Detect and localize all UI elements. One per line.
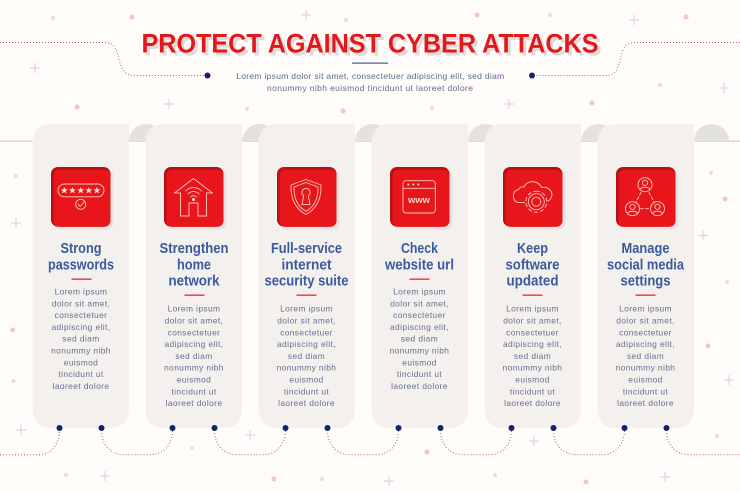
body text: dolor sit amet, [165, 316, 223, 326]
body text: tincidunt ut [623, 386, 668, 396]
heading: passwords [48, 257, 114, 273]
body text: nonummy nibh [616, 363, 675, 373]
heading: Full-service [271, 241, 342, 257]
ribbon curls [129, 124, 729, 141]
body text: euismod [515, 374, 550, 384]
body text: adipiscing elit, [616, 339, 675, 349]
body text: laoreet dolore [278, 398, 335, 408]
heading: website url [384, 257, 454, 273]
body text: laoreet dolore [504, 398, 561, 408]
panel: check website url [372, 124, 468, 431]
body text: consectetuer [619, 327, 672, 337]
body text: laoreet dolore [53, 381, 109, 391]
body text: laoreet dolore [391, 381, 448, 391]
title: PROTECT AGAINST CYBER ATTACKS [142, 29, 598, 59]
red rule [72, 278, 92, 280]
panel: strong passwords [32, 124, 129, 431]
body text: laoreet dolore [166, 398, 222, 408]
red rule [636, 294, 656, 296]
heading [607, 241, 685, 290]
body text: nonummy nibh [503, 363, 562, 373]
heading: security suite [264, 274, 348, 290]
body text: Lorem ipsum [168, 304, 220, 314]
body text: adipiscing elit, [51, 322, 111, 332]
body text: nonummy nibh [277, 363, 336, 373]
heading: network [168, 274, 220, 290]
heading [48, 241, 114, 273]
heading: updated [506, 274, 558, 290]
heading: social media [607, 257, 685, 273]
title underline [352, 62, 388, 64]
icon: shield keyhole [291, 180, 321, 214]
body text: dolor sit amet, [616, 316, 675, 326]
body text [390, 286, 449, 391]
heading: home [177, 257, 211, 273]
body text: euismod [64, 357, 98, 367]
body text: adipiscing elit, [390, 322, 449, 332]
ribbon line [0, 140, 740, 142]
body text: Lorem ipsum [280, 304, 333, 314]
body text: euismod [289, 374, 324, 384]
red rule [522, 294, 542, 296]
body text: sed diam [627, 351, 664, 361]
panel: strengthen home network [146, 124, 242, 431]
panel: manage social media settings [598, 124, 694, 431]
bottom connectors [0, 430, 740, 455]
heading: Strong [60, 241, 102, 257]
body text [51, 286, 111, 391]
heading: Strengthen [160, 241, 228, 257]
body text: sed diam [175, 351, 213, 361]
body text [277, 304, 336, 408]
icon: browser window [403, 181, 435, 213]
heading: settings [620, 274, 670, 290]
body text: laoreet dolore [617, 398, 674, 408]
body text: tincidunt ut [171, 386, 217, 396]
body text: sed diam [62, 334, 100, 344]
icon: browser window: www [407, 195, 431, 205]
body text: consectetuer [55, 310, 107, 320]
body text [164, 304, 224, 408]
body text: dolor sit amet, [503, 316, 562, 326]
icon: cloud gear [513, 182, 552, 212]
body text: euismod [177, 374, 211, 384]
body text: nonummy nibh [390, 346, 449, 356]
heading: internet [282, 257, 332, 273]
body text: sed diam [514, 351, 551, 361]
body text: tincidunt ut [510, 386, 555, 396]
body text: Lorem ipsum [55, 286, 107, 296]
red rule [296, 294, 316, 296]
body text: dolor sit amet, [52, 298, 110, 308]
red rule [410, 278, 430, 280]
heading: Check [401, 241, 439, 257]
title: PROTECT AGAINST CYBER ATTACKS [144, 32, 602, 62]
body text: sed diam [288, 351, 325, 361]
subtitle [236, 71, 504, 93]
red rule [184, 294, 204, 296]
body text: consectetuer [280, 327, 333, 337]
body text: consectetuer [393, 310, 446, 320]
body text: Lorem ipsum [506, 304, 559, 314]
heading [264, 241, 348, 290]
body text: nonummy nibh [51, 346, 111, 356]
body text: adipiscing elit, [503, 339, 562, 349]
body text: tincidunt ut [284, 386, 329, 396]
body text: nonummy nibh [164, 363, 224, 373]
body text: euismod [402, 357, 437, 367]
body text: Lorem ipsum [393, 286, 446, 296]
icon: home wifi [174, 178, 212, 216]
body text [616, 304, 675, 408]
body text: Lorem ipsum [619, 304, 672, 314]
body text: euismod [628, 374, 663, 384]
body text: dolor sit amet, [277, 316, 336, 326]
heading: Keep [517, 241, 548, 257]
subtitle: Lorem ipsum dolor sit amet, consectetuer adipiscing elit, sed diam [236, 71, 504, 81]
connector: top right [529, 42, 740, 78]
panel: keep software updated [484, 124, 581, 431]
heading [384, 241, 454, 273]
body text: adipiscing elit, [277, 339, 336, 349]
body text [503, 304, 562, 408]
icon: social network people [626, 178, 664, 216]
heading: software [506, 257, 560, 273]
body text: tincidunt ut [58, 369, 104, 379]
connector: top left [0, 42, 210, 78]
heading [160, 241, 228, 290]
heading [506, 241, 560, 290]
body text: dolor sit amet, [390, 298, 449, 308]
body text: sed diam [401, 334, 438, 344]
subtitle: nonummy nibh euismod tincidunt ut laoreet dolore [267, 83, 473, 93]
icon: password field [58, 184, 104, 209]
body text: consectetuer [506, 327, 559, 337]
heading: Manage [622, 241, 670, 257]
body text: adipiscing elit, [164, 339, 224, 349]
body text: consectetuer [168, 327, 220, 337]
panel: full-service internet security suite [258, 124, 355, 431]
body text: tincidunt ut [397, 369, 442, 379]
